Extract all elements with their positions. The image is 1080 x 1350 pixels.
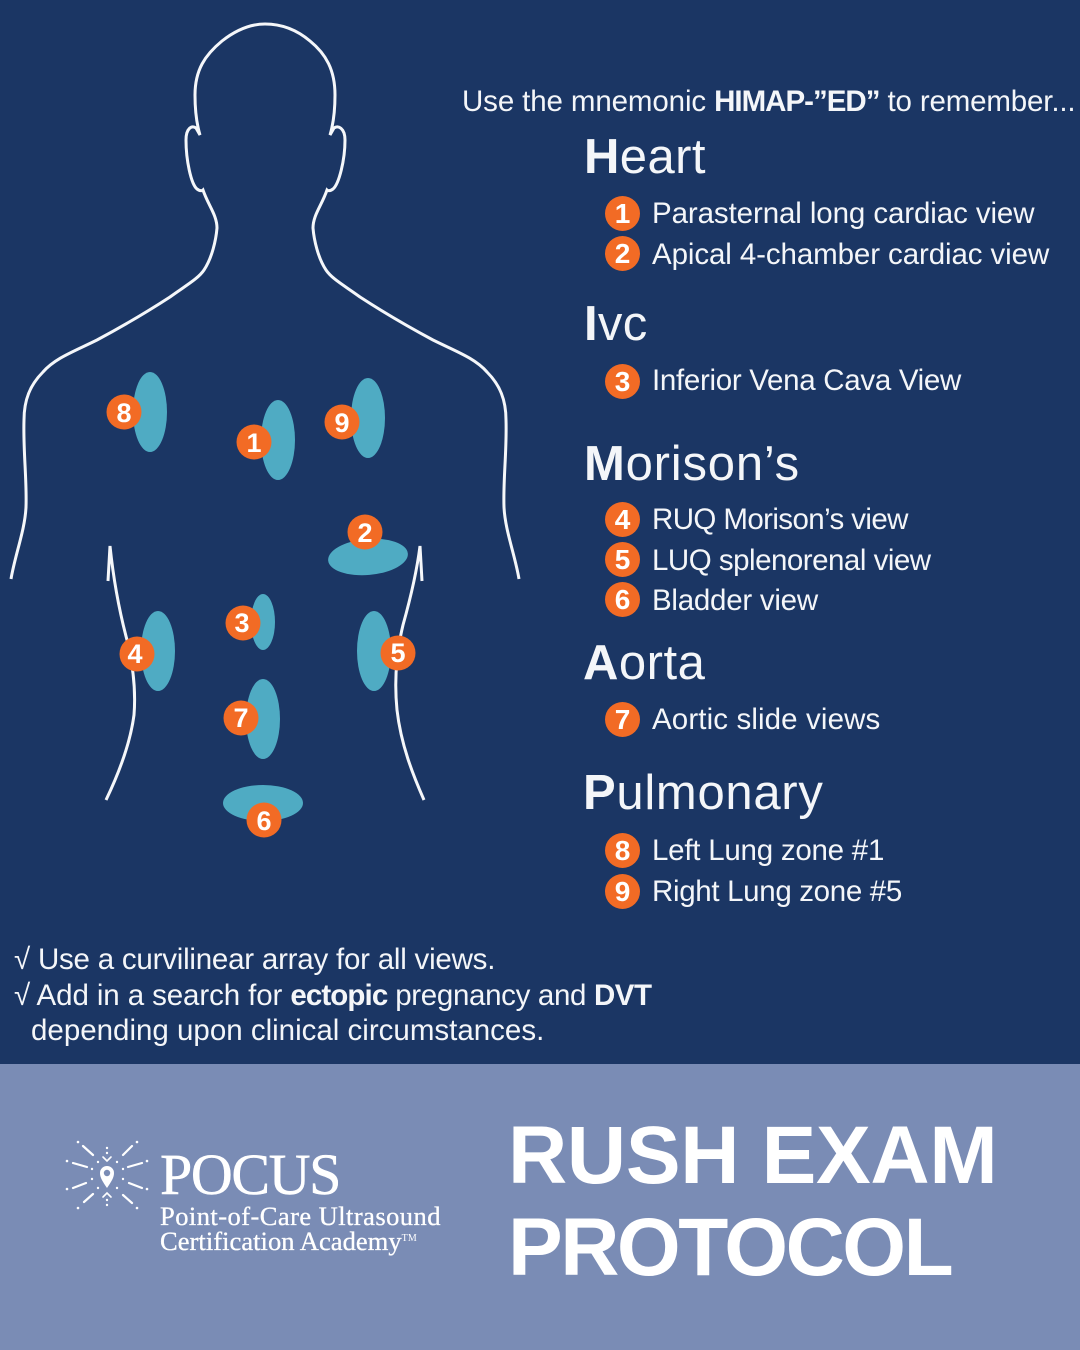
badge 7: 7 bbox=[615, 704, 630, 735]
item 4: RUQ Morison’s view bbox=[652, 503, 908, 536]
item 5: LUQ splenorenal view bbox=[652, 544, 931, 577]
probe position 1 bbox=[236, 400, 295, 480]
probe position 6 bbox=[223, 785, 303, 838]
body outline: head and shoulders bbox=[11, 24, 519, 579]
item 6: Bladder view bbox=[652, 584, 818, 617]
logo wordmark: POCUS bbox=[160, 1142, 340, 1207]
badge 6 bbox=[605, 582, 640, 617]
probe position 3: 3 bbox=[234, 608, 250, 638]
body outline: right torso bbox=[396, 546, 424, 800]
item 7: Aortic slide views bbox=[652, 703, 880, 736]
probe position 4: 4 bbox=[127, 639, 143, 669]
badge 1 bbox=[605, 196, 640, 231]
item 9: Right Lung zone #5 bbox=[652, 875, 902, 908]
badge 3: 3 bbox=[615, 366, 630, 397]
probe position 2: 2 bbox=[357, 518, 373, 548]
probe position 5: 5 bbox=[390, 638, 406, 668]
section: IVC: Ivc bbox=[584, 297, 648, 351]
section: Heart: Heart bbox=[584, 130, 706, 184]
logo tagline bbox=[160, 1201, 441, 1256]
badge 9 bbox=[605, 874, 640, 909]
logo icon bbox=[66, 1140, 148, 1210]
probe position 5 bbox=[357, 611, 416, 691]
badge 2: 2 bbox=[615, 238, 630, 269]
probe position 7: 7 bbox=[233, 703, 249, 733]
badge 4 bbox=[605, 502, 640, 537]
mnemonic intro: Use the mnemonic HIMAP-”ED” to remember... bbox=[462, 85, 1075, 118]
main title: PROTOCOL bbox=[508, 1202, 951, 1293]
badge 8: 8 bbox=[615, 835, 630, 866]
section: Pulmonary: Pulmonary bbox=[583, 766, 824, 820]
item 2: Apical 4-chamber cardiac view bbox=[652, 238, 1049, 271]
probe position 9 bbox=[324, 378, 385, 458]
notes bbox=[14, 943, 652, 1047]
probe position 4 bbox=[120, 611, 175, 691]
probe position 3 bbox=[226, 594, 275, 650]
badge 1: 1 bbox=[615, 198, 630, 229]
badge 5 bbox=[605, 542, 640, 577]
footer band bbox=[0, 1064, 1080, 1350]
section: Morison's: Morison’s bbox=[584, 437, 800, 491]
badge 9: 9 bbox=[615, 876, 630, 907]
item 3: Inferior Vena Cava View bbox=[652, 364, 961, 397]
probe position 8 bbox=[106, 372, 167, 452]
notes: √ Use a curvilinear array for all views. bbox=[14, 943, 495, 976]
probe position 7 bbox=[224, 679, 280, 759]
probe position 9: 9 bbox=[334, 408, 350, 438]
logo tagline: Certification AcademyTM bbox=[160, 1226, 417, 1256]
body diagram bbox=[10, 22, 520, 838]
badge 4: 4 bbox=[615, 504, 630, 535]
body outline: left torso bbox=[106, 546, 135, 800]
notes: depending upon clinical circumstances. bbox=[31, 1014, 544, 1047]
probe position 2 bbox=[327, 514, 409, 578]
badge 7 bbox=[605, 702, 640, 737]
probe position 1: 1 bbox=[246, 428, 262, 458]
badge 2 bbox=[605, 236, 640, 271]
badge 3 bbox=[605, 364, 640, 399]
badge 6: 6 bbox=[615, 584, 630, 615]
item 1: Parasternal long cardiac view bbox=[652, 197, 1034, 230]
badge 8 bbox=[605, 833, 640, 868]
badge 5: 5 bbox=[615, 544, 630, 575]
main title bbox=[508, 1110, 997, 1293]
logo tagline: Point-of-Care Ultrasound bbox=[160, 1201, 441, 1231]
notes: √ Add in a search for ectopic pregnancy and DVT bbox=[14, 978, 651, 1012]
probe position 6: 6 bbox=[256, 806, 272, 836]
item 8: Left Lung zone #1 bbox=[652, 834, 884, 867]
main title: RUSH EXAM bbox=[508, 1110, 997, 1201]
section: Aorta: Aorta bbox=[583, 636, 705, 690]
probe position 8: 8 bbox=[116, 398, 132, 428]
